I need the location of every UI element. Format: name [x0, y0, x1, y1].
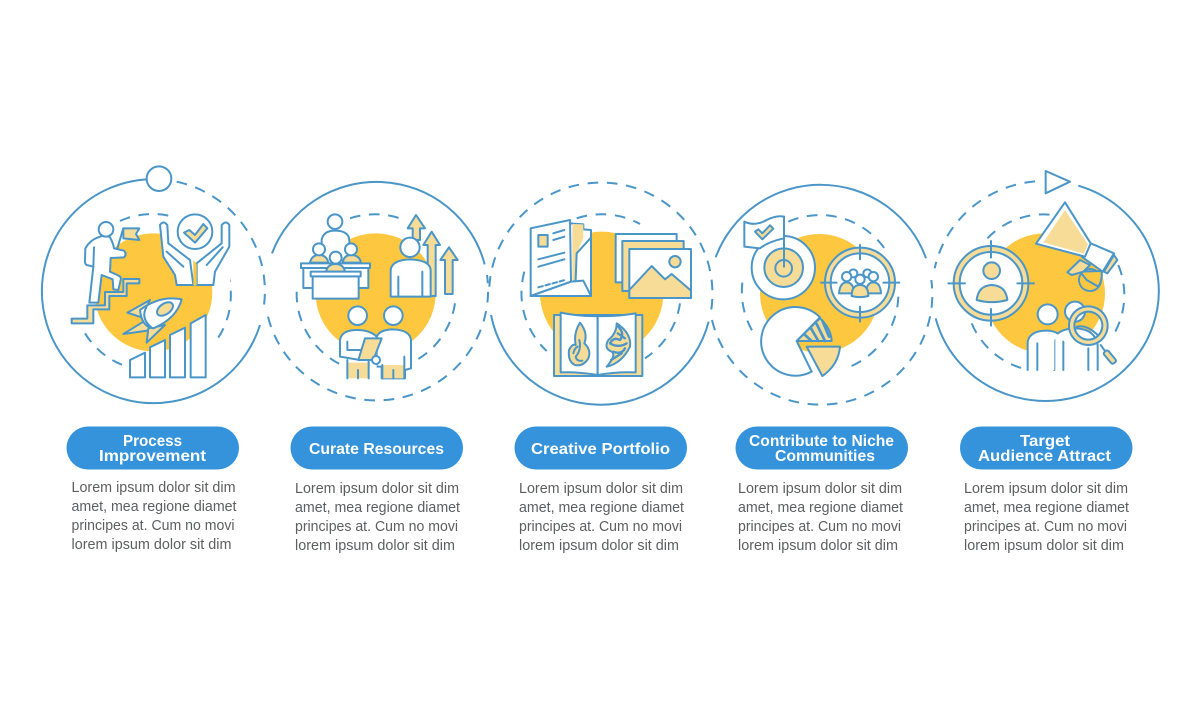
text block: step 5 description: principes at. Cum no movi: [964, 519, 1127, 535]
text block: step 3 description: [519, 481, 684, 554]
icon: audience in crosshair: [821, 245, 899, 322]
text block: step 5 description: [964, 481, 1129, 554]
icon: two people with magnifier: [1028, 302, 1117, 370]
ring: step 3 outer: [489, 183, 712, 405]
step 3: creative portfolio graphic: [489, 183, 712, 405]
yellow circle: step 4: [760, 234, 879, 353]
icon: flag on target: [744, 216, 815, 299]
icon: rocket: [123, 298, 182, 343]
icon: hands holding check mark: [160, 214, 230, 285]
text block: step 4 description: Lorem ipsum dolor sit dim: [738, 481, 902, 497]
label pill: curate resources: Curate Resources: [309, 441, 444, 458]
text block: step 1 description: Lorem ipsum dolor sit dim: [72, 480, 236, 496]
icon: growth bars: [130, 315, 206, 377]
text block: step 4 description: [738, 481, 903, 554]
ring: step 3 inner dashed: [521, 214, 680, 358]
text block: step 3 description: Lorem ipsum dolor sit dim: [519, 481, 683, 497]
label pill: process improvement: Improvement: [99, 448, 207, 465]
label pill: creative portfolio: Creative Portfolio: [531, 441, 670, 458]
text block: step 1 description: [72, 480, 236, 553]
icon: folder with document: [531, 220, 591, 296]
icon: climber on stairs with flag: [72, 222, 139, 323]
text block: step 1 description: principes at. Cum no movi: [72, 518, 234, 534]
label pill: target audience attract: Target: [1020, 433, 1071, 450]
text block: step 3 description: lorem ipsum dolor sit dim: [519, 538, 679, 554]
ring: step 5 inner dashed: [972, 214, 1124, 369]
ring: step 5 outer: [935, 171, 1159, 401]
icon: open book with flame and dragon: [554, 313, 642, 376]
icon: stacked pictures: [616, 234, 691, 298]
label pill: contribute to niche communities: [736, 426, 908, 470]
step 5: target audience attract graphic: [935, 171, 1159, 401]
step 4: contribute to niche communities graphic: [712, 185, 932, 405]
icon: pie chart: [761, 307, 840, 376]
text block: step 4 description: principes at. Cum no movi: [738, 519, 901, 535]
label pill: process improvement: [66, 426, 239, 470]
text block: step 5 description: lorem ipsum dolor sit dim: [964, 538, 1124, 554]
icon: megaphone: [1036, 202, 1117, 291]
yellow circle: step 5: [985, 233, 1105, 353]
text block: step 1 description: amet, mea regione diamet: [72, 499, 236, 515]
label pill: curate resources: [290, 426, 463, 470]
text block: step 5 description: amet, mea regione diamet: [964, 500, 1129, 516]
yellow circle: step 1: [94, 233, 212, 351]
icon: person with rising arrows: [391, 215, 458, 297]
yellow circle: step 3: [540, 232, 663, 355]
icon: two people with clipboard: [340, 306, 411, 378]
icon: person in crosshair: [948, 241, 1034, 326]
text block: step 3 description: principes at. Cum no movi: [519, 519, 682, 535]
ring: step 4 outer: [712, 185, 932, 405]
step 2: curate resources graphic: [268, 182, 488, 400]
ring: step 2 inner dashed: [297, 214, 455, 365]
text block: step 2 description: [295, 481, 460, 554]
icon: classroom with desks: [301, 214, 370, 299]
text block: step 4 description: amet, mea regione diamet: [738, 500, 903, 516]
label pill: creative portfolio: [514, 426, 687, 470]
yellow circle: step 2: [316, 233, 436, 353]
text block: step 1 description: lorem ipsum dolor sit dim: [72, 537, 232, 553]
text block: step 3 description: amet, mea regione diamet: [519, 500, 684, 516]
label pill: contribute to niche communities: Contribute to Niche: [749, 433, 894, 450]
ring: step 1 inner dashed: [85, 214, 231, 366]
label pill: contribute to niche communities: Communities: [775, 448, 875, 465]
ring: step 4 inner dashed: [742, 215, 898, 367]
ring: step 2 outer: [268, 182, 488, 400]
step 1: process improvement graphic: [42, 166, 265, 403]
text block: step 2 description: principes at. Cum no movi: [295, 519, 458, 535]
text block: step 2 description: amet, mea regione diamet: [295, 500, 460, 516]
text block: step 2 description: Lorem ipsum dolor sit dim: [295, 481, 459, 497]
label pill: target audience attract: Audience Attract: [978, 448, 1112, 465]
label pill: process improvement: Process: [123, 433, 182, 450]
text block: step 4 description: lorem ipsum dolor sit dim: [738, 538, 898, 554]
ring: step 1 outer: [42, 166, 265, 403]
label pill: target audience attract: [960, 426, 1132, 470]
text block: step 2 description: lorem ipsum dolor sit dim: [295, 538, 455, 554]
text block: step 5 description: Lorem ipsum dolor sit dim: [964, 481, 1128, 497]
